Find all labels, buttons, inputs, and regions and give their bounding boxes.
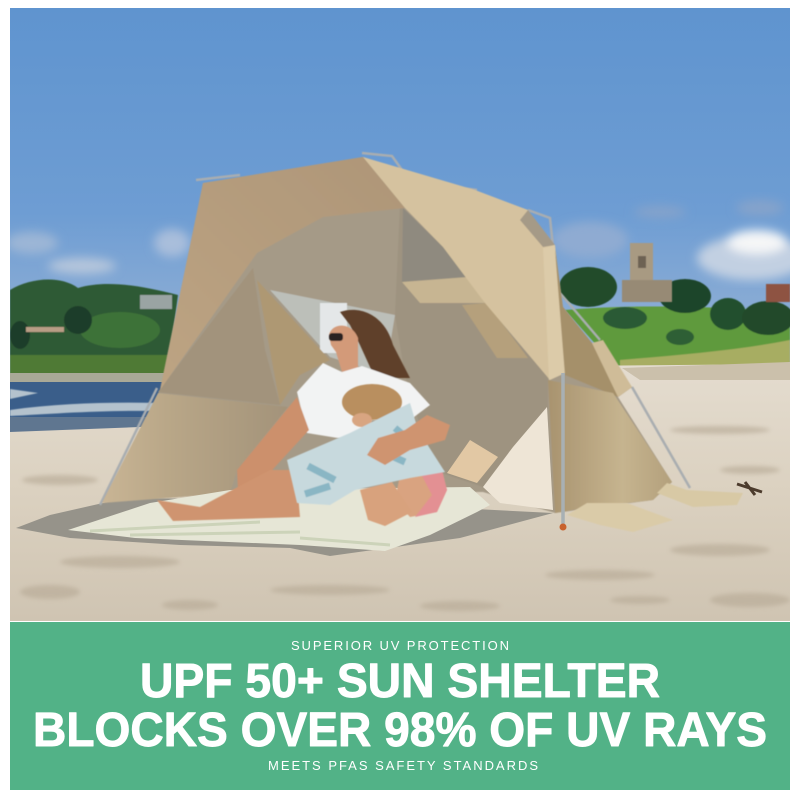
inner tan flap — [257, 280, 330, 405]
window — [270, 290, 395, 375]
base shell — [158, 208, 666, 514]
sea — [10, 373, 175, 432]
sky — [10, 8, 790, 380]
legs — [157, 470, 300, 521]
tent sand pockets — [567, 483, 743, 532]
support pole — [561, 373, 565, 525]
tent — [100, 153, 690, 513]
eyebrow text: SUPERIOR UV PROTECTION — [291, 638, 509, 653]
front flap — [363, 157, 565, 380]
blue towel — [287, 403, 445, 505]
clouds — [6, 200, 800, 280]
left mid wall — [158, 268, 280, 405]
top canopy — [160, 157, 405, 390]
right upper shell — [555, 254, 618, 397]
towel — [68, 487, 490, 551]
hair — [340, 310, 410, 378]
face — [329, 326, 358, 372]
mother's hand and arm — [367, 415, 450, 465]
ground sheet — [16, 498, 553, 556]
distant tree line and hill — [10, 267, 794, 375]
upper interior strip — [402, 208, 468, 282]
back wall — [253, 208, 405, 315]
headline line 1: UPF 50+ SUN SHELTER — [140, 655, 660, 708]
panel: beach photograph — [6, 8, 800, 621]
patterned bag — [447, 440, 498, 483]
flap side strip — [543, 245, 565, 380]
seaweed — [737, 482, 762, 495]
hair — [342, 384, 402, 420]
inner right flap — [462, 303, 528, 358]
headline line 2: BLOCKS OVER 98% OF UV RAYS — [33, 704, 767, 757]
white shirt — [297, 363, 430, 440]
building through window — [320, 303, 347, 353]
pink shorts — [415, 470, 447, 517]
mother — [157, 310, 447, 521]
right interior wall — [395, 205, 548, 487]
panel: green caption banner — [10, 622, 790, 790]
interior shelf — [402, 277, 485, 303]
orange peg — [560, 524, 566, 530]
face — [352, 413, 372, 427]
child's leg — [360, 482, 412, 526]
child — [287, 384, 450, 526]
sand texture — [20, 426, 790, 611]
footer text: MEETS PFAS SAFETY STANDARDS — [268, 758, 538, 773]
lower right panel — [548, 380, 672, 513]
near arm — [237, 397, 309, 492]
lower left bright panel — [102, 393, 288, 503]
church tower — [622, 243, 672, 302]
white blanket — [483, 407, 553, 510]
sand — [10, 364, 790, 621]
tent poles — [100, 153, 690, 505]
thigh — [395, 470, 447, 517]
sunglasses — [329, 333, 343, 341]
